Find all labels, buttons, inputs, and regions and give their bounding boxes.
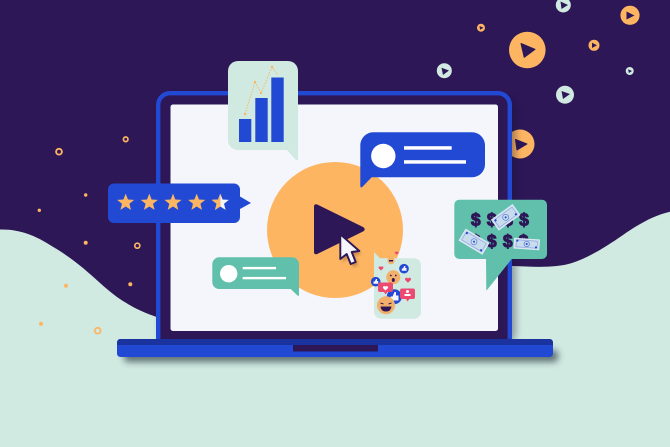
floating play icons <box>437 0 640 158</box>
bar chart bubble <box>228 61 298 160</box>
dollar signs: $ <box>503 231 513 251</box>
dollar signs: $ <box>487 210 497 230</box>
laptop base <box>117 339 553 357</box>
hearts <box>379 252 411 283</box>
profile reaction <box>400 288 415 302</box>
laptop screen <box>170 104 498 331</box>
dollar signs: $ <box>471 210 481 230</box>
dollar signs: $ <box>471 231 481 251</box>
social reactions bubble <box>371 252 421 319</box>
dollar signs <box>471 210 529 251</box>
laptop base shadow <box>124 350 558 362</box>
cursor arrow <box>340 234 359 264</box>
video play button <box>267 162 403 298</box>
chart bars <box>239 78 284 142</box>
laughing emoji <box>377 296 395 314</box>
laptop <box>117 91 558 362</box>
banknote 2 <box>459 229 489 254</box>
laptop frame <box>156 91 512 345</box>
trend line <box>244 66 278 115</box>
blue comment bubble <box>360 132 485 187</box>
big thumbs up <box>387 289 402 304</box>
dollar signs: $ <box>519 231 529 251</box>
laptop shadow <box>160 96 516 346</box>
mint wave <box>0 212 670 447</box>
cursor shadow <box>342 237 362 267</box>
small emoji <box>387 257 395 264</box>
laptop notch <box>293 345 378 352</box>
thumbs up top <box>399 264 409 274</box>
money bubble <box>454 200 547 290</box>
stars <box>117 194 229 210</box>
dollar signs: $ <box>487 231 497 251</box>
star rating bubble <box>108 184 251 223</box>
banknote 3 <box>514 238 540 250</box>
heart reaction <box>378 282 393 294</box>
surprised emoji <box>386 270 400 284</box>
banknote 1 <box>491 205 520 230</box>
left decorative dots <box>38 137 140 334</box>
dollar signs: $ <box>503 210 513 230</box>
thumbs up left <box>371 277 381 287</box>
green comment bubble <box>212 257 299 296</box>
dollar signs: $ <box>519 210 529 230</box>
